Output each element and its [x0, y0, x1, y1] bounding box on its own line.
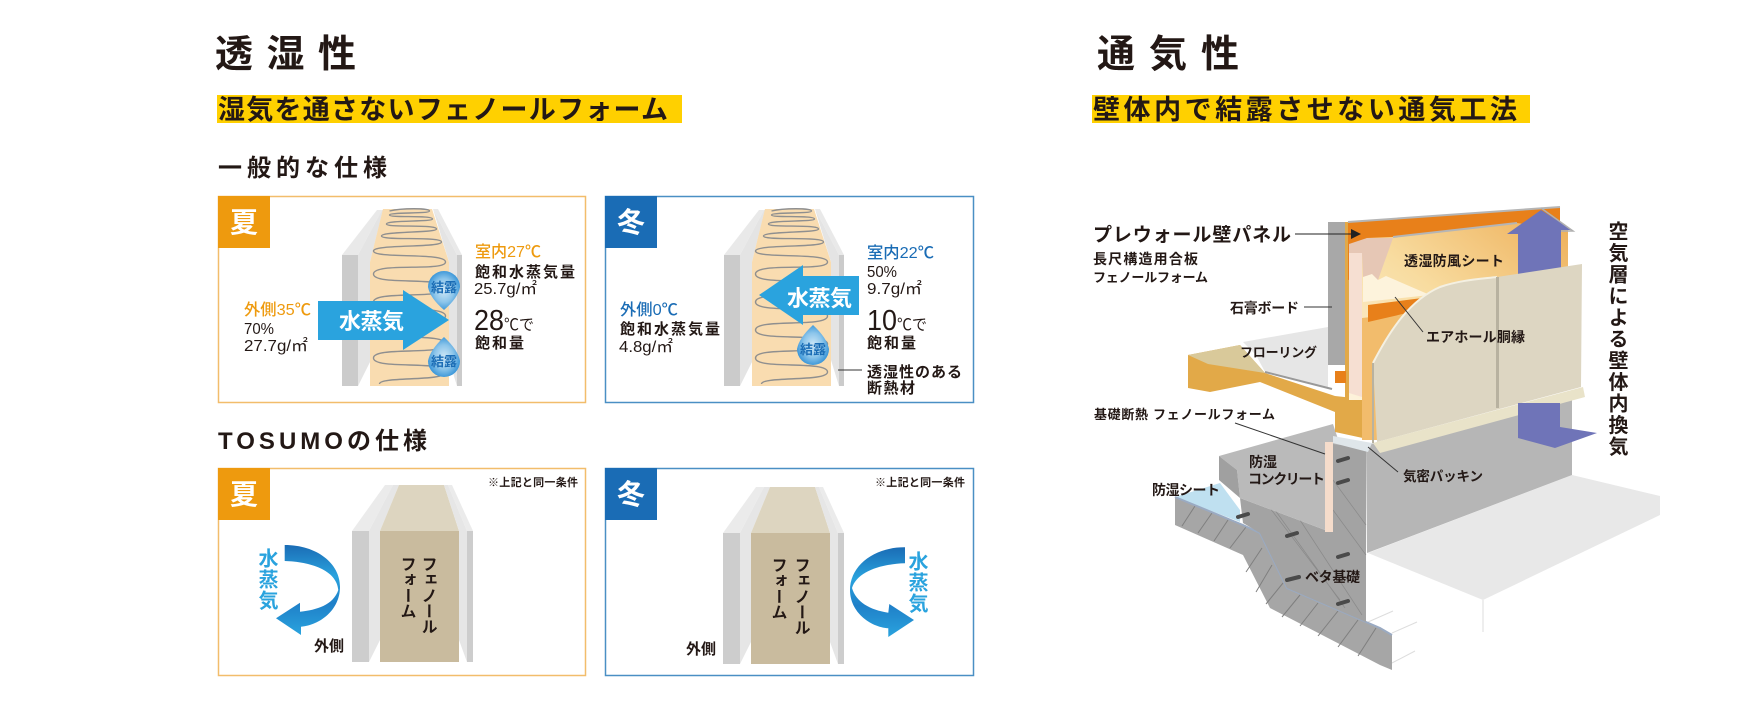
sheet lower shade [1362, 290, 1450, 440]
label: moisture-proof concrete: 防湿 [1249, 454, 1277, 470]
outdoor conditions: 外側0℃ [620, 301, 678, 319]
saturation temperature note: 飽和量 [475, 334, 524, 352]
outdoor conditions: 27.7g/㎡ [244, 337, 308, 355]
furring strip [1368, 297, 1430, 322]
label: panel materials: フェノールフォーム [1093, 270, 1208, 285]
moisture-proof concrete [1219, 424, 1340, 530]
wall cross-section with fibrous insulation [724, 209, 844, 386]
season badge: summer [218, 196, 270, 248]
outside label: 外側 [314, 637, 344, 655]
label: airtight packing: 気密パッキン [1403, 468, 1483, 484]
label: wall panel with arrow: プレウォール壁パネル [1093, 224, 1291, 246]
panel: TOSUMO spec summer [218, 468, 586, 676]
outdoor conditions: 4.8g/㎡ [619, 338, 673, 356]
label: furring strip: エアホール胴縁 [1426, 329, 1525, 345]
curved vapor arrow [276, 545, 340, 635]
indoor conditions: 飽和水蒸気量 [475, 263, 575, 281]
condensation droplet [797, 325, 829, 365]
label: mat foundation: ベタ基礎 [1305, 569, 1360, 585]
outside label: 外側 [686, 640, 716, 658]
foundation insulation [1325, 442, 1333, 532]
condensation droplet: 結露 [800, 342, 826, 357]
note: ※上記と同一条件 [875, 475, 965, 489]
label: moisture-proof concrete [1248, 454, 1325, 487]
label: foundation insulation [1094, 407, 1325, 454]
saturation temperature note: ℃で [897, 317, 927, 334]
purple air arrow upper [1507, 210, 1572, 280]
condensation droplet lower: 結露 [431, 354, 457, 369]
water vapor arrow: 水蒸気 [787, 286, 852, 311]
ground slab [1368, 475, 1660, 600]
outdoor conditions: 70% [244, 321, 274, 338]
inner pink panel [1349, 238, 1430, 397]
concrete wall behind [1366, 395, 1572, 553]
water vapor arrow [318, 290, 449, 350]
saturation temperature note: ℃で [504, 317, 534, 334]
label: furring strip [1395, 297, 1525, 345]
indoor conditions: 25.7g/㎡ [474, 280, 537, 298]
heading: TOSUMOの仕様: TOSUMOの仕様 [218, 428, 427, 455]
heading: 一般的な仕様: 一般的な仕様 [218, 155, 392, 182]
panel: general spec summer [218, 196, 586, 402]
foam label: フォーム [768, 557, 786, 619]
season badge: summer [218, 468, 270, 520]
label: foundation insulation: 基礎断熱 フェノールフォーム [1094, 407, 1275, 422]
indoor conditions [474, 243, 575, 298]
condensation droplet upper [428, 271, 460, 310]
curved vapor arrow [850, 547, 914, 637]
label: breathable wind sheet: 透湿防風シート [1404, 253, 1504, 269]
packing strip [1333, 436, 1372, 452]
right subtitle bar: 壁体内で結露させない通気工法 [1093, 95, 1517, 125]
season badge: winter [605, 468, 657, 520]
rebar ends [1368, 611, 1417, 663]
indoor conditions: 50% [867, 264, 897, 281]
condensation droplet upper: 結露 [431, 280, 457, 295]
indoor conditions: 室内22℃ [867, 244, 934, 262]
anchor bolts [1238, 458, 1348, 604]
outdoor conditions [244, 301, 311, 355]
foam label [768, 557, 810, 635]
saturation temperature note [867, 305, 927, 352]
water vapor arrow: 水蒸気 [339, 309, 404, 334]
foam label: フェノール [792, 557, 810, 635]
water vapor arrow [759, 265, 859, 325]
season badge: winter [605, 196, 657, 248]
saturation temperature note: 飽和量 [867, 334, 916, 352]
label: flooring: フローリング [1240, 345, 1317, 360]
label: moisture sheet: 防湿シート [1152, 482, 1220, 498]
label: gypsum board [1230, 300, 1332, 316]
outdoor conditions: 飽和水蒸気量 [620, 320, 720, 338]
insulation label with leader [838, 364, 962, 397]
outdoor conditions [619, 301, 720, 356]
gypsum board [1328, 222, 1345, 365]
sill wood [1188, 345, 1372, 440]
left subtitle bar: 湿気を通さないフェノールフォーム [218, 95, 668, 125]
wall cross-section with phenolic foam [723, 487, 844, 664]
condensation droplet lower [428, 337, 460, 377]
wall cross-section with phenolic foam [352, 485, 473, 662]
right section title: 通気性: 通気性 [1097, 34, 1253, 76]
wall cross-section with fibrous insulation [342, 209, 462, 386]
vapor label: 水蒸気 [255, 548, 278, 611]
saturation temperature note: 10 [867, 305, 897, 337]
insulation label with leader: 断熱材 [867, 379, 915, 397]
exterior siding panel [1373, 264, 1585, 453]
wall construction cutaway illustration [1175, 207, 1660, 670]
panel: general spec winter [605, 196, 974, 402]
season badge: winter: 冬 [617, 479, 645, 510]
vapor label: 水蒸気 [905, 551, 928, 614]
purple air arrow lower [1518, 403, 1597, 448]
indoor conditions: 9.7g/㎡ [867, 280, 922, 298]
foundation base section [1175, 497, 1392, 670]
label: gypsum board: 石膏ボード [1230, 300, 1299, 316]
label: moisture-proof concrete: コンクリート [1248, 471, 1325, 487]
outer orange panel [1348, 207, 1560, 280]
saturation temperature note: 28 [474, 305, 504, 337]
season badge: summer: 夏 [230, 479, 258, 510]
foam label: フォーム [398, 556, 416, 618]
foundation vertical section [1240, 440, 1366, 622]
panel: TOSUMO spec winter [605, 468, 974, 676]
season badge: winter: 冬 [617, 207, 645, 238]
foam label: フェノール [418, 556, 436, 634]
vertical label: ventilation: 空気層による壁体内換気 [1605, 221, 1628, 458]
saturation temperature note [474, 305, 534, 352]
left section title: 透湿性: 透湿性 [215, 34, 370, 76]
note: ※上記と同一条件 [488, 475, 578, 489]
season badge: summer: 夏 [230, 207, 258, 238]
label: panel materials [1093, 251, 1208, 285]
outdoor conditions: 外側35℃ [244, 301, 311, 319]
label: panel materials: 長尺構造用合板 [1093, 251, 1198, 267]
breathable wind sheet [1349, 223, 1568, 400]
label: airtight packing [1368, 447, 1483, 484]
indoor conditions [867, 244, 934, 298]
moisture barrier sheet [1175, 483, 1240, 522]
foam label [398, 556, 436, 634]
flooring [1243, 327, 1328, 387]
indoor conditions: 室内27℃ [475, 243, 541, 261]
insulation label with leader: 透湿性のある [867, 364, 962, 381]
